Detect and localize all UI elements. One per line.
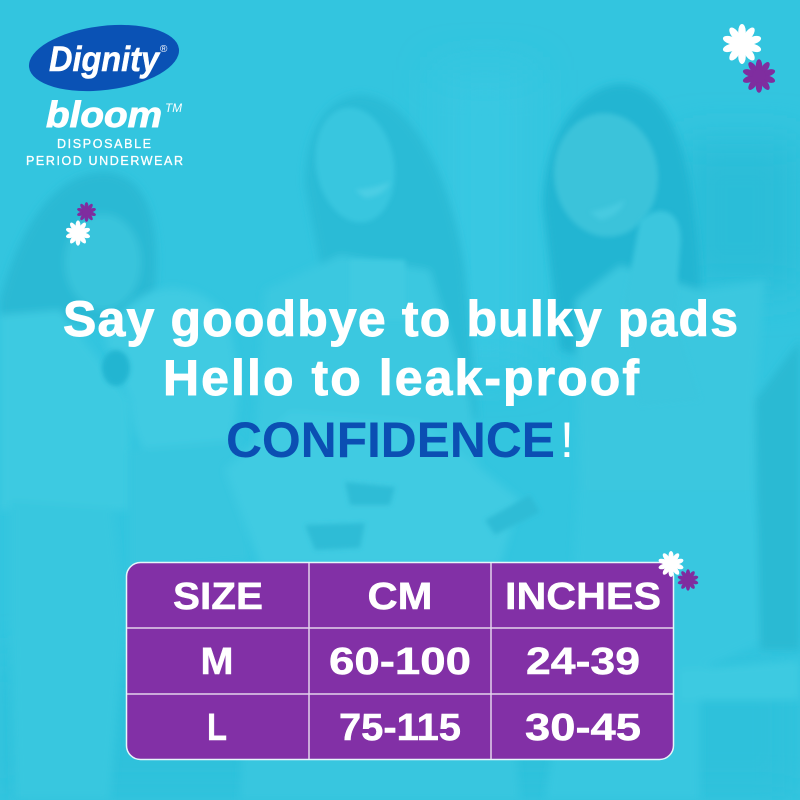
- row L: [207, 707, 641, 749]
- headline: Hello to leak-proof: [163, 350, 639, 406]
- headline: [63, 291, 738, 468]
- trademark: TM: [165, 101, 182, 115]
- row M: 60-100: [329, 641, 471, 683]
- brand name: Dignity: [49, 40, 160, 79]
- bottle and jacket details: [305, 482, 540, 550]
- header row: [173, 576, 661, 618]
- size table: [126, 562, 674, 760]
- header row: CM: [368, 576, 432, 618]
- row L: L: [207, 707, 227, 749]
- registered mark: ®: [160, 44, 168, 55]
- header row: INCHES: [505, 576, 661, 618]
- header row: SIZE: [173, 576, 263, 618]
- row M: M: [200, 641, 234, 683]
- row M: 24-39: [526, 641, 640, 683]
- right girl face: [548, 108, 664, 242]
- dog figure: [102, 289, 250, 570]
- icon: flowers on left girl: [65, 202, 96, 246]
- row M: [200, 641, 640, 683]
- row L: 30-45: [525, 707, 641, 749]
- row L: 75-115: [339, 707, 461, 749]
- centre girl figure: [225, 95, 520, 800]
- right girl figure: [543, 84, 800, 800]
- icon: flowers top right: [722, 24, 776, 93]
- Dignity blue oval: [25, 17, 183, 99]
- product descriptor: DISPOSABLE: [57, 137, 151, 151]
- icon: flowers on table corner: [658, 551, 699, 591]
- left girl figure: [0, 172, 156, 800]
- confidence highlight: CONFIDENCE: [226, 412, 555, 468]
- logo: PERIOD UNDERWEAR: [26, 154, 183, 168]
- headline: Say goodbye to bulky pads: [63, 291, 738, 347]
- bloom wordmark: bloom: [46, 94, 162, 135]
- centre girl face: [307, 101, 403, 229]
- logo: [25, 17, 183, 168]
- headline: !: [560, 412, 574, 468]
